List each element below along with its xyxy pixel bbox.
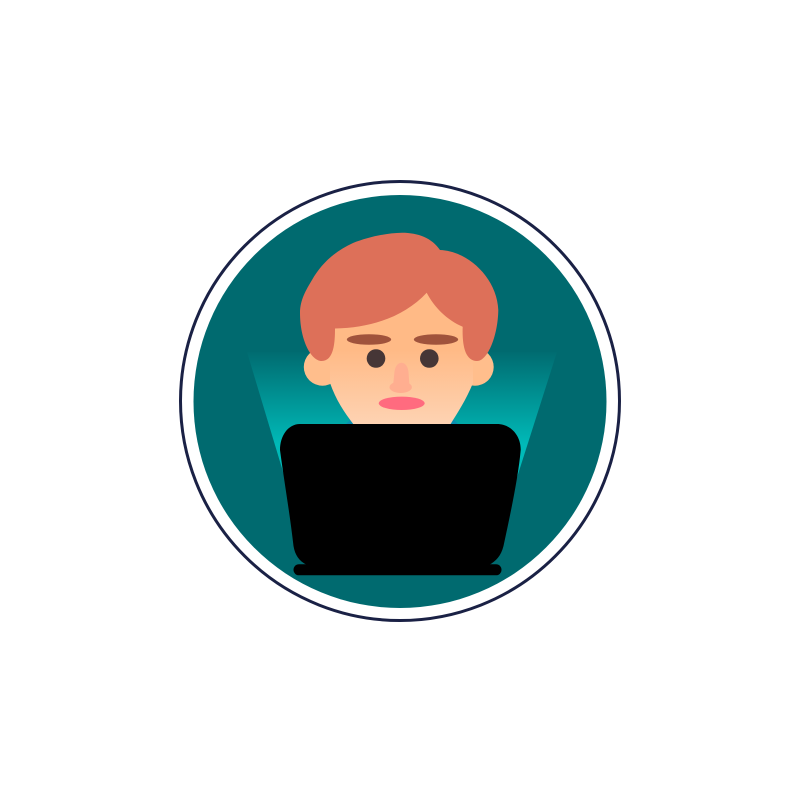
laptop [280, 424, 521, 575]
left eye [367, 349, 385, 368]
mouth [379, 397, 425, 410]
laptop base [294, 564, 502, 575]
person [300, 233, 498, 426]
nose [390, 363, 412, 393]
ears [304, 348, 494, 386]
outer ring [180, 182, 620, 620]
left eyebrow [347, 334, 391, 345]
right eyebrow [414, 334, 458, 345]
hair [300, 233, 498, 361]
laptop lid [280, 424, 521, 565]
shoulders [344, 418, 460, 426]
right eye [420, 349, 439, 368]
screen light beam [247, 352, 557, 490]
face [330, 280, 473, 425]
teal disc [194, 195, 606, 608]
